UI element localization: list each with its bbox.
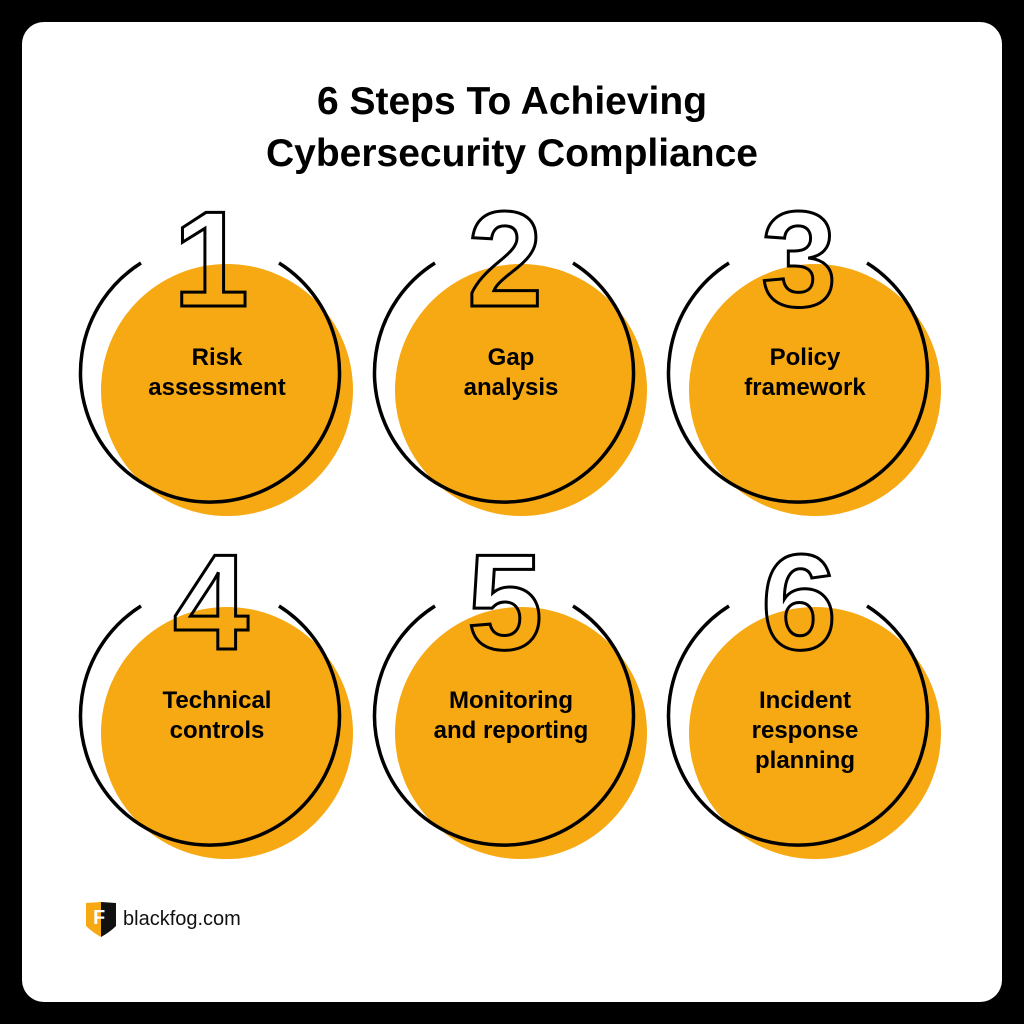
step 6: planning [755,747,855,774]
logo: blackfog.com [123,908,241,930]
step 5: 5 [467,526,543,678]
title [266,80,758,175]
step 4: Technical [163,687,271,714]
step 3 [668,183,941,516]
step 3: Policy [770,344,841,371]
step 3: framework [744,374,866,401]
step 6: 6 [761,526,837,678]
step 2 [374,183,647,516]
title: Cybersecurity Compliance [266,132,758,175]
step 5: Monitoring [449,687,573,714]
step 2: analysis [464,374,558,401]
logo: F [93,907,105,929]
step 1: assessment [148,374,286,401]
step 2: 2 [467,183,543,335]
step 3: 3 [761,183,837,335]
logo [86,902,241,937]
step 4 [81,526,353,859]
step 4: 4 [173,526,249,678]
title: 6 Steps To Achieving [317,80,707,123]
step 5 [374,526,647,859]
step 5: and reporting [434,717,588,744]
step 1 [81,183,353,516]
step 2: Gap [488,344,534,371]
step 1: 1 [173,183,249,335]
step 4: controls [170,717,264,744]
step 6: Incident [759,687,851,714]
step 6: response [752,717,858,744]
step 1: Risk [192,344,243,371]
step 6 [668,526,941,859]
